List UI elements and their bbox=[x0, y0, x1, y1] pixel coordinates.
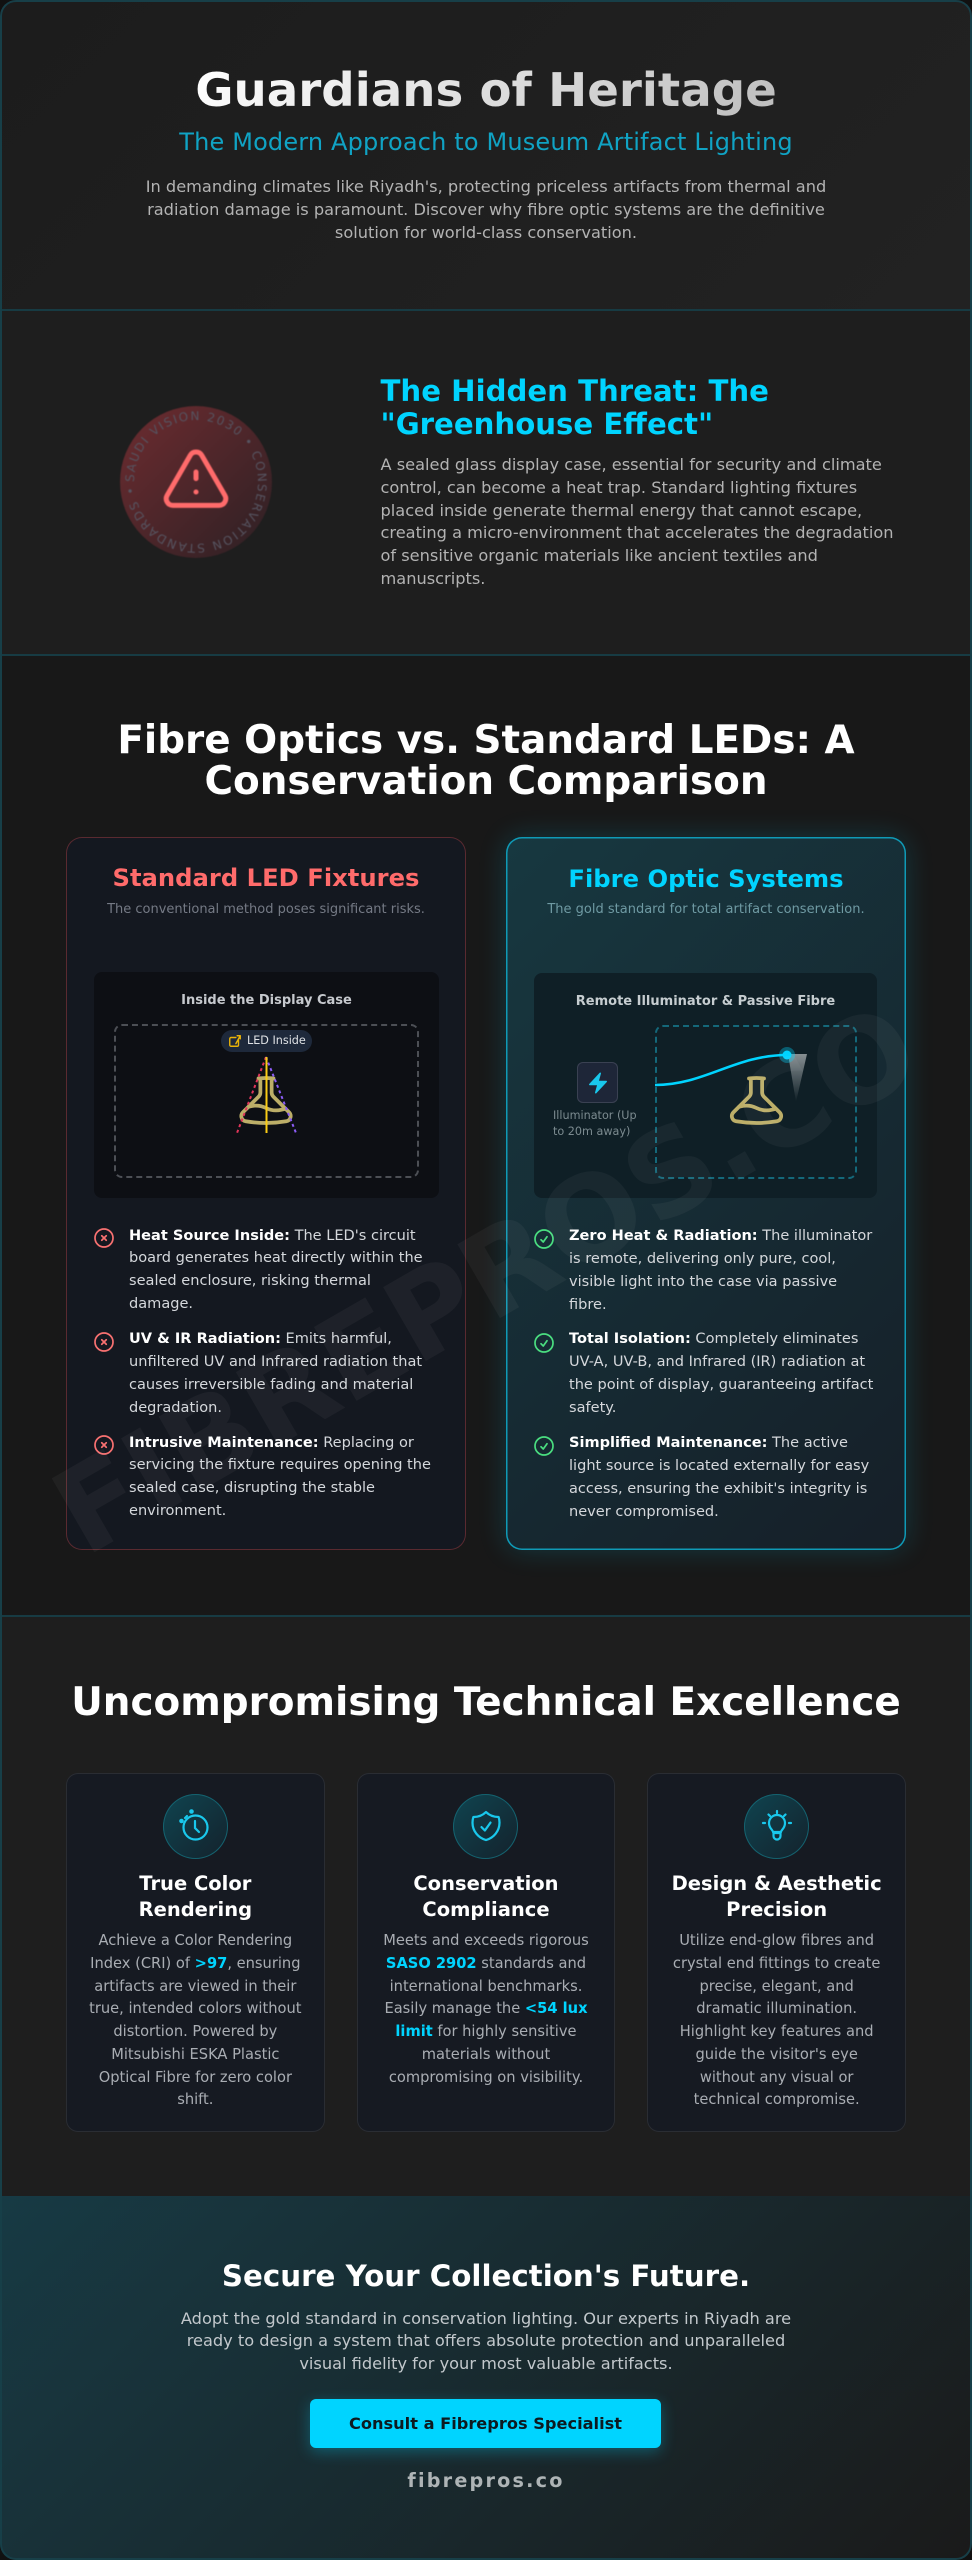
panel: standard LED card bbox=[66, 837, 466, 1550]
display case outline bbox=[114, 1024, 419, 1178]
card title: Fibre Optic Systems bbox=[568, 864, 844, 893]
icon: warning seal: SAUDI VISION 2030 • CONSERVATION STANDARDS • bbox=[124, 411, 268, 554]
card title: Standard LED Fixtures bbox=[112, 863, 419, 892]
card text: true, intended colors without bbox=[89, 2000, 302, 2017]
card subtitle: The gold standard for total artifact conservation. bbox=[547, 902, 865, 917]
threat text: creating a micro-environment that accelerates the degradation bbox=[380, 523, 894, 542]
list item: zero heat: fibre. bbox=[569, 1296, 607, 1313]
comparison heading bbox=[117, 718, 855, 804]
threat heading: The Hidden Threat: The bbox=[380, 374, 769, 408]
list item: simplified maintenance: access, ensuring the exhibit's integrity is bbox=[569, 1480, 867, 1497]
list item: isolation: the point of display, guaranteeing artifact bbox=[569, 1376, 873, 1393]
card text bbox=[89, 1932, 302, 2108]
title: Guardians of Heritage bbox=[195, 64, 777, 118]
card text bbox=[673, 1932, 880, 2108]
panel: call to action bbox=[0, 2196, 972, 2560]
technical heading: Uncompromising Technical Excellence bbox=[71, 1680, 901, 1725]
icon: light bulb bbox=[744, 1794, 809, 1858]
diagram label: Remote Illuminator & Passive Fibre bbox=[576, 994, 835, 1009]
icon: illuminator bolt bbox=[577, 1062, 618, 1103]
diagram: remote illuminator bbox=[534, 973, 877, 1198]
card: design precision bbox=[647, 1773, 906, 2132]
threat text: manuscripts. bbox=[380, 569, 485, 588]
list item: isolation: Total Isolation: Completely eliminates bbox=[569, 1330, 858, 1347]
card heading bbox=[413, 1872, 559, 1921]
illuminator caption bbox=[553, 1109, 637, 1138]
threat heading: "Greenhouse Effect" bbox=[380, 407, 713, 441]
threat text: of sensitive organic materials like ancient textiles and bbox=[380, 546, 818, 565]
card subtitle: The conventional method poses significant risks. bbox=[107, 902, 425, 917]
card text: Optical Fibre for zero color bbox=[99, 2069, 292, 2086]
intro text bbox=[146, 177, 826, 242]
card heading: Conservation bbox=[413, 1872, 559, 1895]
subtitle: The Modern Approach to Museum Artifact Lighting bbox=[179, 128, 793, 156]
CTA text: visual fidelity for your most valuable artifacts. bbox=[299, 2354, 673, 2373]
panel: technical excellence bbox=[0, 1617, 972, 2197]
card text: technical compromise. bbox=[694, 2091, 860, 2108]
card heading bbox=[139, 1872, 252, 1921]
list item: maintenance: environment. bbox=[129, 1502, 226, 1519]
comparison heading: Fibre Optics vs. Standard LEDs: A bbox=[117, 718, 855, 763]
card text: international benchmarks. bbox=[390, 1978, 582, 1995]
card text: Mitsubishi ESKA Plastic bbox=[111, 2046, 279, 2063]
list item: heat source bbox=[94, 1227, 423, 1312]
card text: guide the visitor's eye bbox=[695, 2046, 858, 2063]
CTA heading: Secure Your Collection's Future. bbox=[222, 2259, 750, 2293]
panel: comparison bbox=[0, 656, 972, 1617]
list item: isolation: UV-A, UV-B, and Infrared (IR) radiation at bbox=[569, 1353, 865, 1370]
list item: simplified maintenance: Simplified Maintenance: The active bbox=[569, 1434, 848, 1451]
illuminator caption: to 20m away) bbox=[553, 1125, 630, 1138]
card text: Achieve a Color Rendering bbox=[98, 1932, 292, 1949]
CTA button: Consult a Fibrepros Specialist bbox=[349, 2414, 622, 2433]
threat heading bbox=[380, 374, 769, 441]
card text bbox=[383, 1932, 589, 2086]
card text: Utilize end-glow fibres and bbox=[679, 1932, 874, 1949]
card text: SASO 2902 standards and bbox=[386, 1955, 586, 1972]
list item: simplified maintenance: never compromised. bbox=[569, 1503, 719, 1520]
brand name: fibrepros.co bbox=[407, 2469, 565, 2492]
card text: Meets and exceeds rigorous bbox=[383, 1932, 589, 1949]
CTA text: ready to design a system that offers absolute protection and unparalleled bbox=[187, 2331, 785, 2350]
header section bbox=[0, 0, 972, 311]
CTA text bbox=[181, 2308, 791, 2373]
card text: Easily manage the <54 lux bbox=[384, 2000, 588, 2017]
list item: simplified maintenance bbox=[534, 1434, 869, 1520]
illuminator caption: Illuminator (Up bbox=[553, 1109, 637, 1122]
list item: isolation: safety. bbox=[569, 1399, 616, 1416]
list item: maintenance: servicing the fixture requires opening the bbox=[129, 1456, 431, 1473]
icon: stopwatch bbox=[163, 1794, 228, 1858]
card heading: Precision bbox=[726, 1898, 827, 1921]
card: conservation compliance bbox=[357, 1773, 615, 2132]
list item: heat source: damage. bbox=[129, 1295, 193, 1312]
threat text bbox=[380, 455, 894, 588]
artifact with fibre and light cone bbox=[655, 1047, 807, 1125]
card heading: Compliance bbox=[422, 1898, 550, 1921]
list item: UV and IR bbox=[94, 1330, 422, 1416]
list item: simplified maintenance: light source is located externally for easy bbox=[569, 1457, 869, 1474]
CTA text: Adopt the gold standard in conservation lighting. Our experts in Riyadh are bbox=[181, 2308, 791, 2328]
comparison heading: Conservation Comparison bbox=[204, 759, 768, 804]
watermark: FIBREPROS.CO bbox=[31, 977, 941, 1582]
panel: hidden threat bbox=[0, 311, 972, 656]
card text: dramatic illumination. bbox=[696, 2000, 857, 2017]
card text: precise, elegant, and bbox=[700, 1978, 854, 1995]
LED pill bbox=[221, 1030, 312, 1052]
list item: heat source: sealed enclosure, risking thermal bbox=[129, 1272, 371, 1289]
list item: isolation bbox=[534, 1330, 873, 1416]
card text: compromising on visibility. bbox=[389, 2069, 583, 2086]
card text: crystal end fittings to create bbox=[673, 1955, 880, 1972]
list item: zero heat bbox=[534, 1227, 872, 1313]
list item: maintenance: sealed case, disrupting the stable bbox=[129, 1479, 375, 1496]
card heading: Rendering bbox=[139, 1898, 252, 1921]
LED pill: LED Inside bbox=[247, 1034, 306, 1047]
list item: UV and IR: degradation. bbox=[129, 1399, 222, 1416]
card text: without any visual or bbox=[700, 2069, 853, 2086]
card text: Highlight key features and bbox=[680, 2023, 874, 2040]
threat text: control, can become a heat trap. Standard lighting fixtures bbox=[380, 478, 857, 497]
list item: UV and IR: UV & IR Radiation: Emits harmful, bbox=[129, 1330, 392, 1347]
diagram: inside the display case bbox=[94, 972, 439, 1198]
card text: distortion. Powered by bbox=[113, 2023, 277, 2040]
card text: shift. bbox=[177, 2091, 213, 2108]
card heading bbox=[672, 1872, 882, 1921]
card heading: True Color bbox=[139, 1872, 251, 1895]
intro text: solution for world-class conservation. bbox=[335, 223, 637, 242]
list item: UV and IR: unfiltered UV and Infrared radiation that bbox=[129, 1353, 422, 1370]
icon: shield check bbox=[453, 1794, 518, 1858]
list item: maintenance: Intrusive Maintenance: Replacing or bbox=[129, 1434, 414, 1451]
list item: zero heat: visible light into the case via passive bbox=[569, 1273, 837, 1290]
panel: fibre optic card bbox=[506, 837, 906, 1550]
card text: Index (CRI) of >97, ensuring bbox=[90, 1955, 300, 1972]
list item: heat source: Heat Source Inside: The LED's circuit bbox=[129, 1227, 416, 1244]
threat text: placed inside generate thermal energy that cannot escape, bbox=[380, 501, 862, 520]
list item: heat source: board generates heat directly within the bbox=[129, 1249, 423, 1266]
list item: UV and IR: causes irreversible fading and material bbox=[129, 1376, 413, 1393]
threat text: A sealed glass display case, essential for security and climate bbox=[380, 455, 882, 474]
card text: materials without bbox=[422, 2046, 550, 2063]
artifact with light rays bbox=[236, 1056, 297, 1133]
intro text: radiation damage is paramount. Discover why fibre optic systems are the definitive bbox=[147, 200, 825, 219]
list item: zero heat: Zero Heat & Radiation: The illuminator bbox=[569, 1227, 872, 1244]
diagram label: Inside the Display Case bbox=[181, 993, 352, 1008]
CTA button bbox=[310, 2399, 661, 2448]
card text: limit for highly sensitive bbox=[395, 2023, 577, 2040]
list item: maintenance bbox=[94, 1434, 431, 1519]
display case outline bbox=[655, 1025, 857, 1179]
list item: zero heat: is remote, delivering only pure, cool, bbox=[569, 1250, 836, 1267]
intro text: In demanding climates like Riyadh's, protecting priceless artifacts from thermal and bbox=[146, 177, 826, 196]
card heading: Design & Aesthetic bbox=[672, 1872, 882, 1895]
card: true color rendering bbox=[66, 1773, 325, 2132]
card text: artifacts are viewed in their bbox=[94, 1978, 296, 1995]
